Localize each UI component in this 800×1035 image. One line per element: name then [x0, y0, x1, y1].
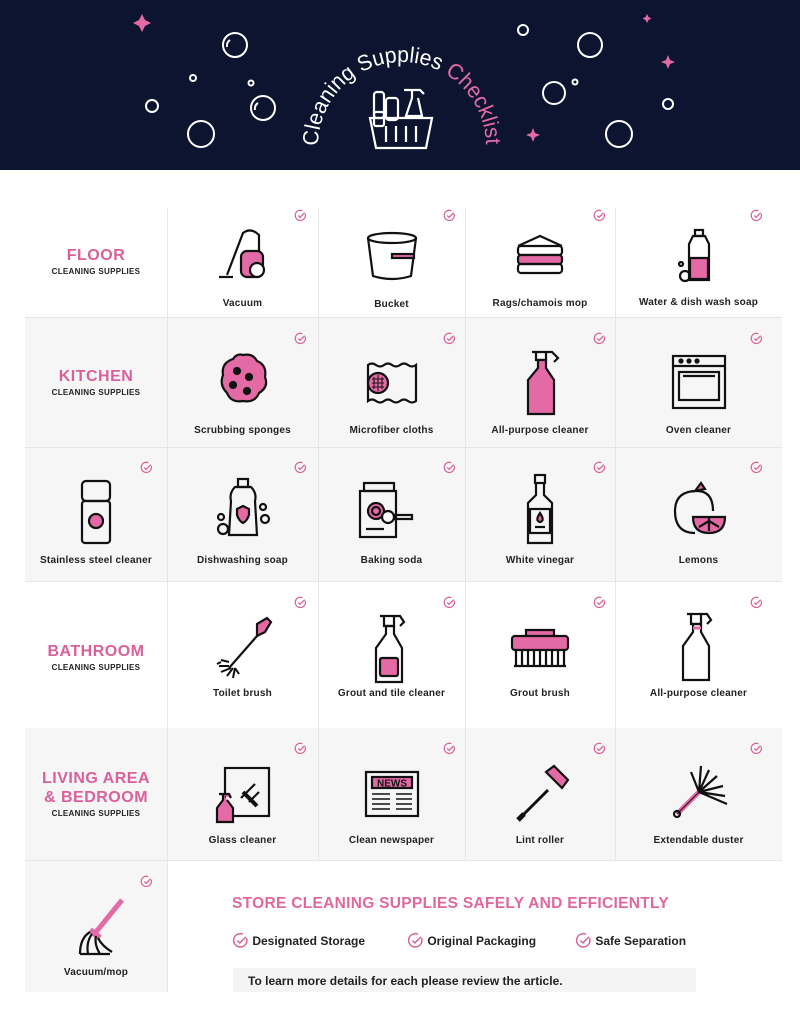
cell: grout brush: Grout brush: [510, 688, 570, 699]
cell: all-purpose cleaner pink: [491, 332, 606, 436]
cell: bucket: Bucket: [374, 299, 409, 310]
cell: oven cleaner: [666, 332, 762, 436]
cell: scrubbing sponges: [194, 332, 306, 436]
cell: dishwashing soap: Dishwashing soap: [197, 555, 288, 566]
note box: [233, 968, 696, 992]
cell: extendable duster: Extendable duster: [653, 835, 744, 846]
cell: lint roller: Lint roller: [516, 835, 564, 846]
cell: water & dish soap: [639, 210, 762, 308]
category: living area & bedroom: LIVING AREA: [42, 770, 150, 787]
category: kitchen: KITCHEN: [59, 368, 133, 385]
cell: vacuum/mop: Vacuum/mop: [64, 967, 128, 978]
cell: white vinegar: [506, 462, 606, 566]
cell: dishwashing soap: [197, 462, 306, 566]
cell: white vinegar: White vinegar: [506, 555, 574, 566]
cell: toilet brush: Toilet brush: [213, 688, 272, 699]
cell: baking soda: Baking soda: [361, 555, 422, 566]
category: bathroom: CLEANING SUPPLIES: [52, 663, 140, 672]
storage tips: [232, 932, 686, 948]
cell: toilet brush: [213, 596, 306, 699]
tip: original packaging: Original Packaging: [427, 934, 536, 948]
category: bathroom: BATHROOM: [47, 643, 145, 660]
note box: To learn more details for each please review the article.: [248, 974, 563, 988]
cell: grout and tile cleaner: Grout and tile cleaner: [338, 688, 445, 699]
storage heading: STORE CLEANING SUPPLIES SAFELY AND EFFICIENTLY: [232, 895, 669, 912]
cell: all-purpose cleaner pink: All-purpose cleaner: [491, 425, 589, 436]
cell: baking soda: [358, 462, 456, 566]
cell: microfiber cloths: Microfiber cloths: [350, 425, 433, 436]
tip: safe separation: Safe Separation: [595, 934, 686, 948]
cell: lint roller: [516, 742, 606, 846]
cell: all-purpose cleaner white: [650, 596, 762, 699]
title arc: Cleaning Supplies Checklist: [303, 46, 500, 144]
cell: rags: Rags/chamois mop: [493, 298, 587, 309]
category: kitchen: [52, 368, 140, 397]
cell: stainless steel cleaner: Stainless steel cleaner: [40, 555, 152, 566]
background bands: [25, 318, 782, 581]
category: living area & bedroom: [42, 770, 150, 818]
icon: basket: [368, 88, 434, 150]
category: floor: CLEANING SUPPLIES: [52, 267, 140, 276]
cell: clean newspaper: Clean newspaper: [349, 835, 434, 846]
cell: lemons: Lemons: [679, 555, 718, 566]
cell: grout and tile cleaner: [338, 596, 456, 699]
cell: bucket: [366, 210, 456, 310]
category: living area & bedroom: CLEANING SUPPLIES: [52, 809, 140, 818]
cell: oven cleaner: Oven cleaner: [666, 425, 731, 436]
category: bathroom: [47, 643, 145, 672]
cell: glass cleaner: Glass cleaner: [209, 835, 276, 846]
category: living area & bedroom: & BEDROOM: [44, 789, 148, 806]
cell: all-purpose cleaner white: All-purpose cleaner: [650, 688, 747, 699]
cell: microfiber cloths: [350, 332, 456, 436]
tip: designated storage: Designated Storage: [252, 934, 365, 948]
cell: clean newspaper: NEWS: [376, 778, 407, 790]
cell: lemons: [674, 462, 762, 566]
cell: water & dish soap: Water & dish wash soap: [639, 297, 758, 308]
category: kitchen: CLEANING SUPPLIES: [52, 388, 140, 397]
cell: vacuum: [219, 210, 306, 309]
cell: vacuum: Vacuum: [223, 298, 262, 309]
cell: vacuum/mop: [64, 876, 152, 978]
cell: stainless steel cleaner: [40, 462, 152, 566]
cell: rags: [493, 210, 606, 309]
cell: grout brush: [510, 596, 606, 699]
cell: clean newspaper: [349, 742, 456, 846]
header banner: [0, 0, 800, 170]
category: floor: [52, 247, 140, 276]
category: floor: FLOOR: [67, 247, 125, 264]
cell: glass cleaner: [209, 742, 306, 846]
cell: extendable duster: [653, 742, 762, 846]
cell: scrubbing sponges: Scrubbing sponges: [194, 425, 291, 436]
